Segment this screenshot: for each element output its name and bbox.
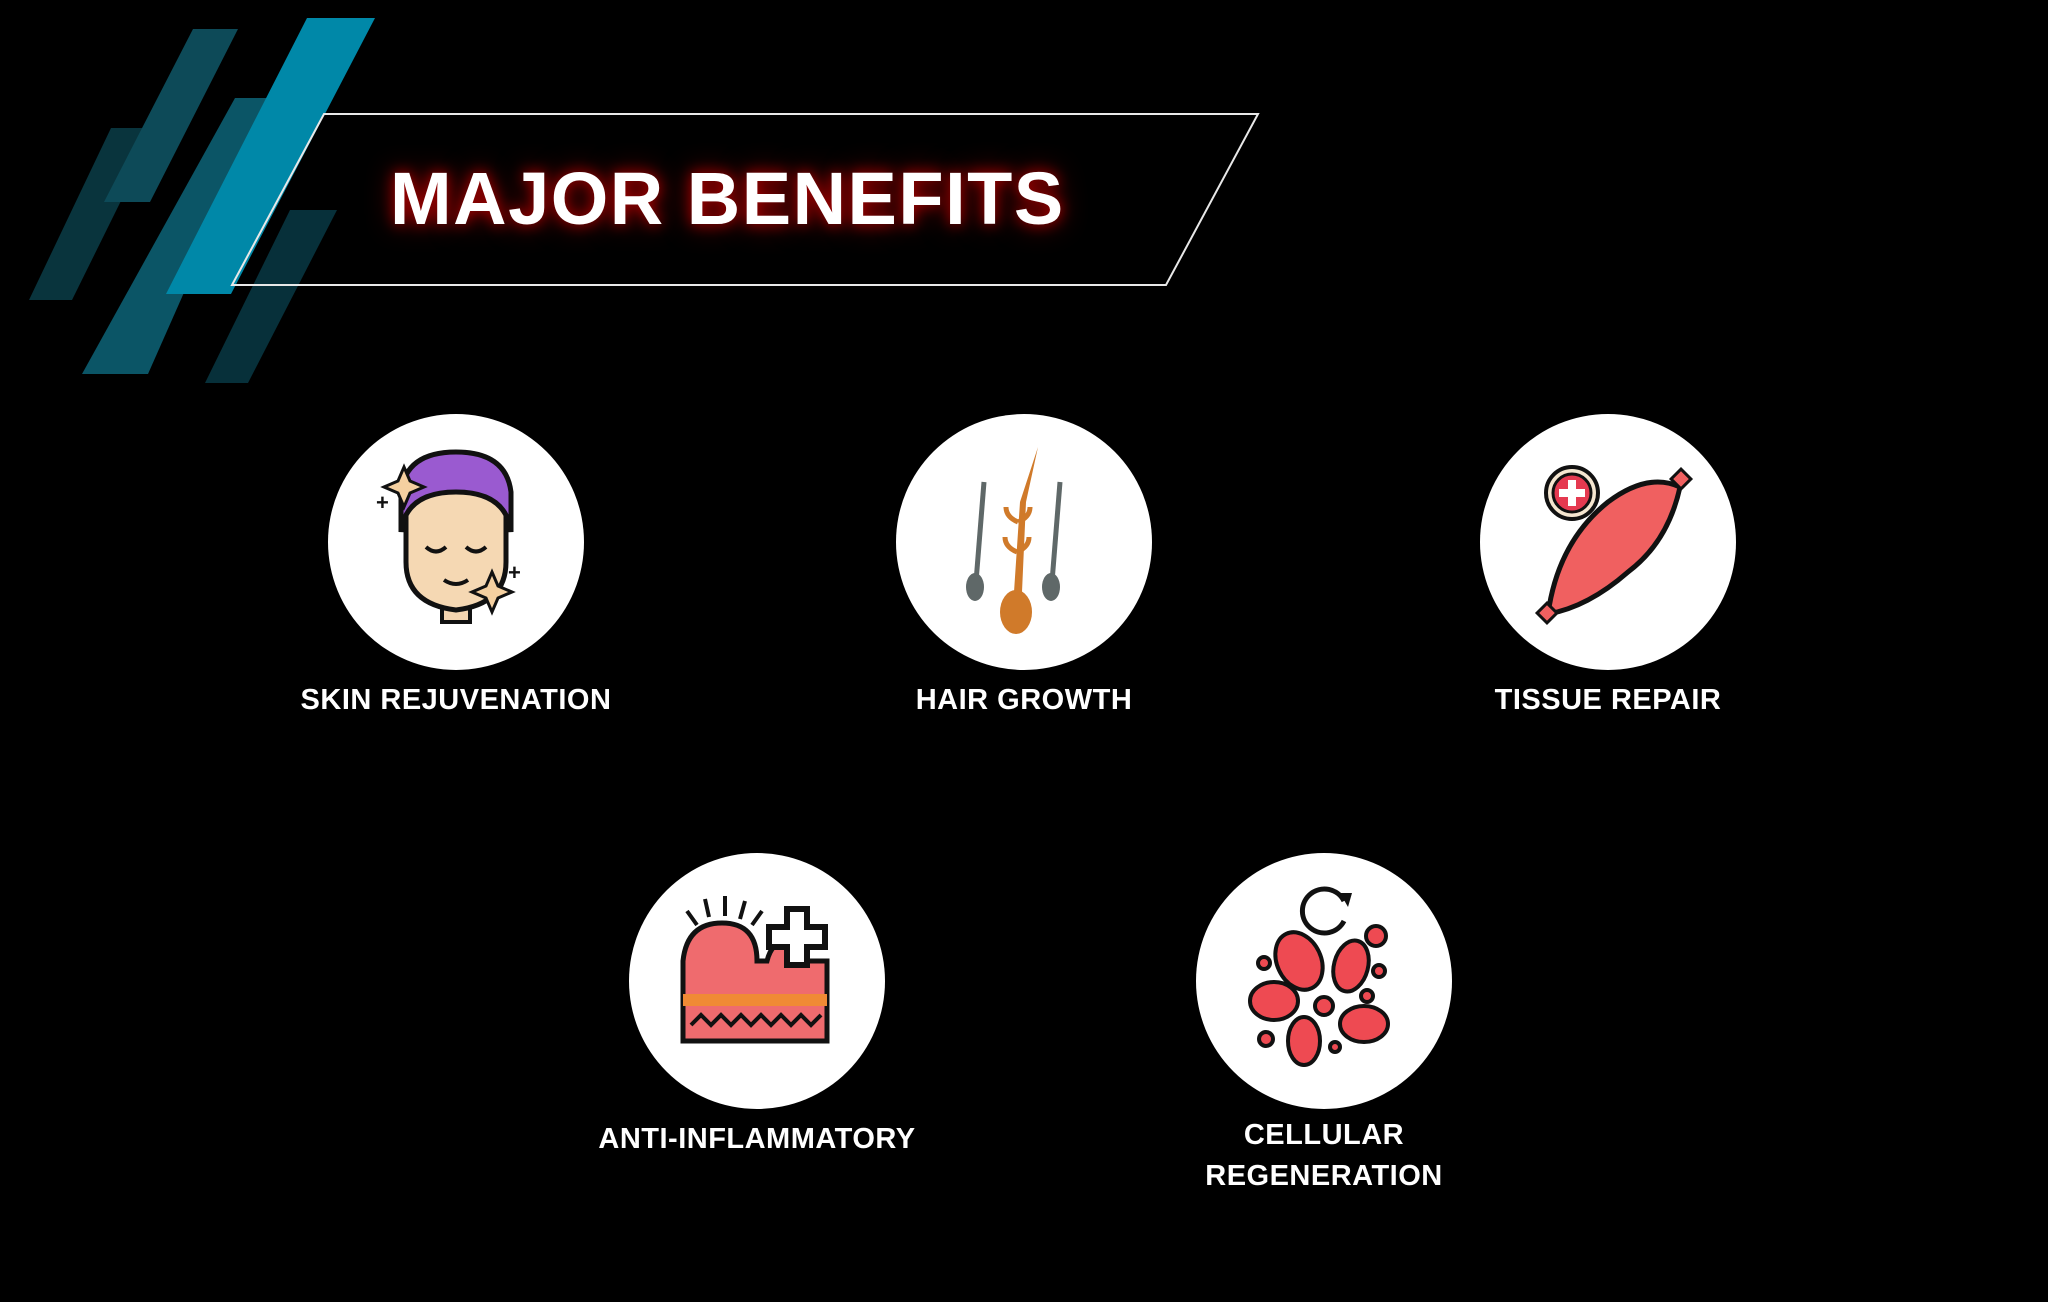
icon: face (328, 414, 584, 670)
benefit: tissue repair (1480, 414, 1736, 716)
title: MAJOR BENEFITS (390, 157, 1065, 240)
icon: face: + (376, 490, 389, 515)
icon: muscle (1480, 414, 1736, 670)
header decoration: stripes and frame (29, 18, 1260, 383)
benefit: hair growth (896, 414, 1152, 716)
label: HAIR GROWTH (916, 684, 1132, 716)
benefit: skin rejuvenation (301, 414, 611, 716)
label: CELLULAR (1244, 1119, 1404, 1151)
icon: face: + (508, 560, 521, 585)
label (1205, 1119, 1443, 1192)
label: SKIN REJUVENATION (301, 684, 611, 716)
icon: cells (1196, 853, 1452, 1109)
icon: inflamed skin (629, 853, 885, 1109)
label: ANTI-INFLAMMATORY (598, 1123, 916, 1155)
icon: hair follicle (896, 414, 1152, 670)
benefit: cellular regeneration (1196, 853, 1452, 1192)
label: TISSUE REPAIR (1495, 684, 1721, 716)
label: REGENERATION (1205, 1160, 1443, 1192)
benefit: anti-inflammatory (598, 853, 916, 1155)
